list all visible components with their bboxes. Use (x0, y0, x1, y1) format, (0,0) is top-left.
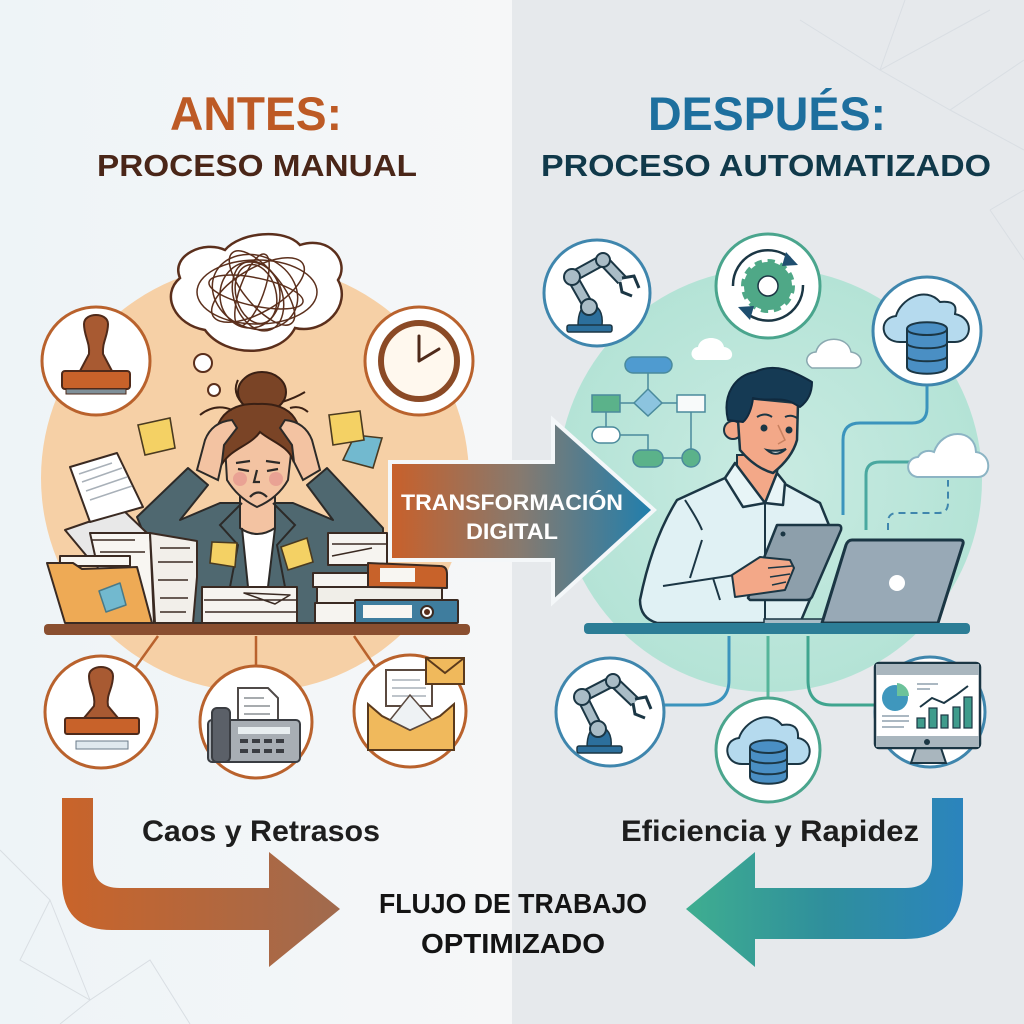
title: antes: PROCESO MANUAL (97, 148, 417, 183)
icon: robot arm bottom (556, 658, 664, 766)
icon: laptop (764, 540, 963, 625)
icon: cloud database top (873, 277, 981, 385)
title: después: DESPUÉS: (648, 87, 886, 140)
small cloud white (692, 338, 732, 360)
icon: gear cycle (716, 234, 820, 338)
small cloud outlined (807, 339, 861, 368)
icon: analytics dashboard (875, 657, 985, 767)
connectors right (660, 636, 880, 705)
icon: clock (365, 307, 473, 415)
icon: stamp bottom (45, 656, 157, 768)
icon: tablet in hand (732, 525, 841, 600)
icon: cloud database bottom (716, 698, 820, 802)
footer label: FLUJO DE TRABAJO (379, 888, 647, 919)
footer label (379, 888, 647, 959)
peach circle backdrop (41, 264, 469, 692)
flowchart diagram (592, 357, 705, 467)
icon: overflowing mail tray (354, 655, 466, 767)
title: antes (97, 87, 417, 183)
background right panel (512, 0, 1024, 1024)
title: después: PROCESO AUTOMATIZADO (541, 148, 991, 183)
center arrow: transformación digital (390, 420, 654, 602)
title: antes: ANTES: (170, 87, 342, 140)
character: businessman (640, 368, 835, 623)
center arrow: transformación digital: DIGITAL (466, 519, 558, 544)
sticky notes (138, 411, 382, 570)
mint circle backdrop (558, 268, 982, 692)
character: stressed woman (137, 372, 383, 623)
icon: fax machine (200, 666, 312, 778)
icon: robot arm top (544, 240, 650, 346)
label: caos y retrasos: Caos y Retrasos (142, 815, 380, 848)
label: eficiencia y rapidez: Eficiencia y Rapidez (621, 815, 919, 848)
connector lines right (843, 386, 948, 530)
arrow: right flow (686, 798, 963, 967)
center arrow: transformación digital: TRANSFORMACIÓN (401, 490, 623, 515)
desk right (584, 623, 970, 634)
footer label: OPTIMIZADO (421, 928, 605, 959)
background left panel (0, 0, 512, 1024)
arrow: left flow (62, 798, 340, 967)
title: después (541, 87, 991, 183)
connectors left (135, 636, 376, 680)
thought bubble with tangled scribble (171, 234, 342, 396)
icon: stamp top (42, 307, 150, 415)
paper piles and folder (47, 453, 458, 623)
icon: cloud right (908, 434, 988, 477)
desk left (44, 624, 470, 635)
